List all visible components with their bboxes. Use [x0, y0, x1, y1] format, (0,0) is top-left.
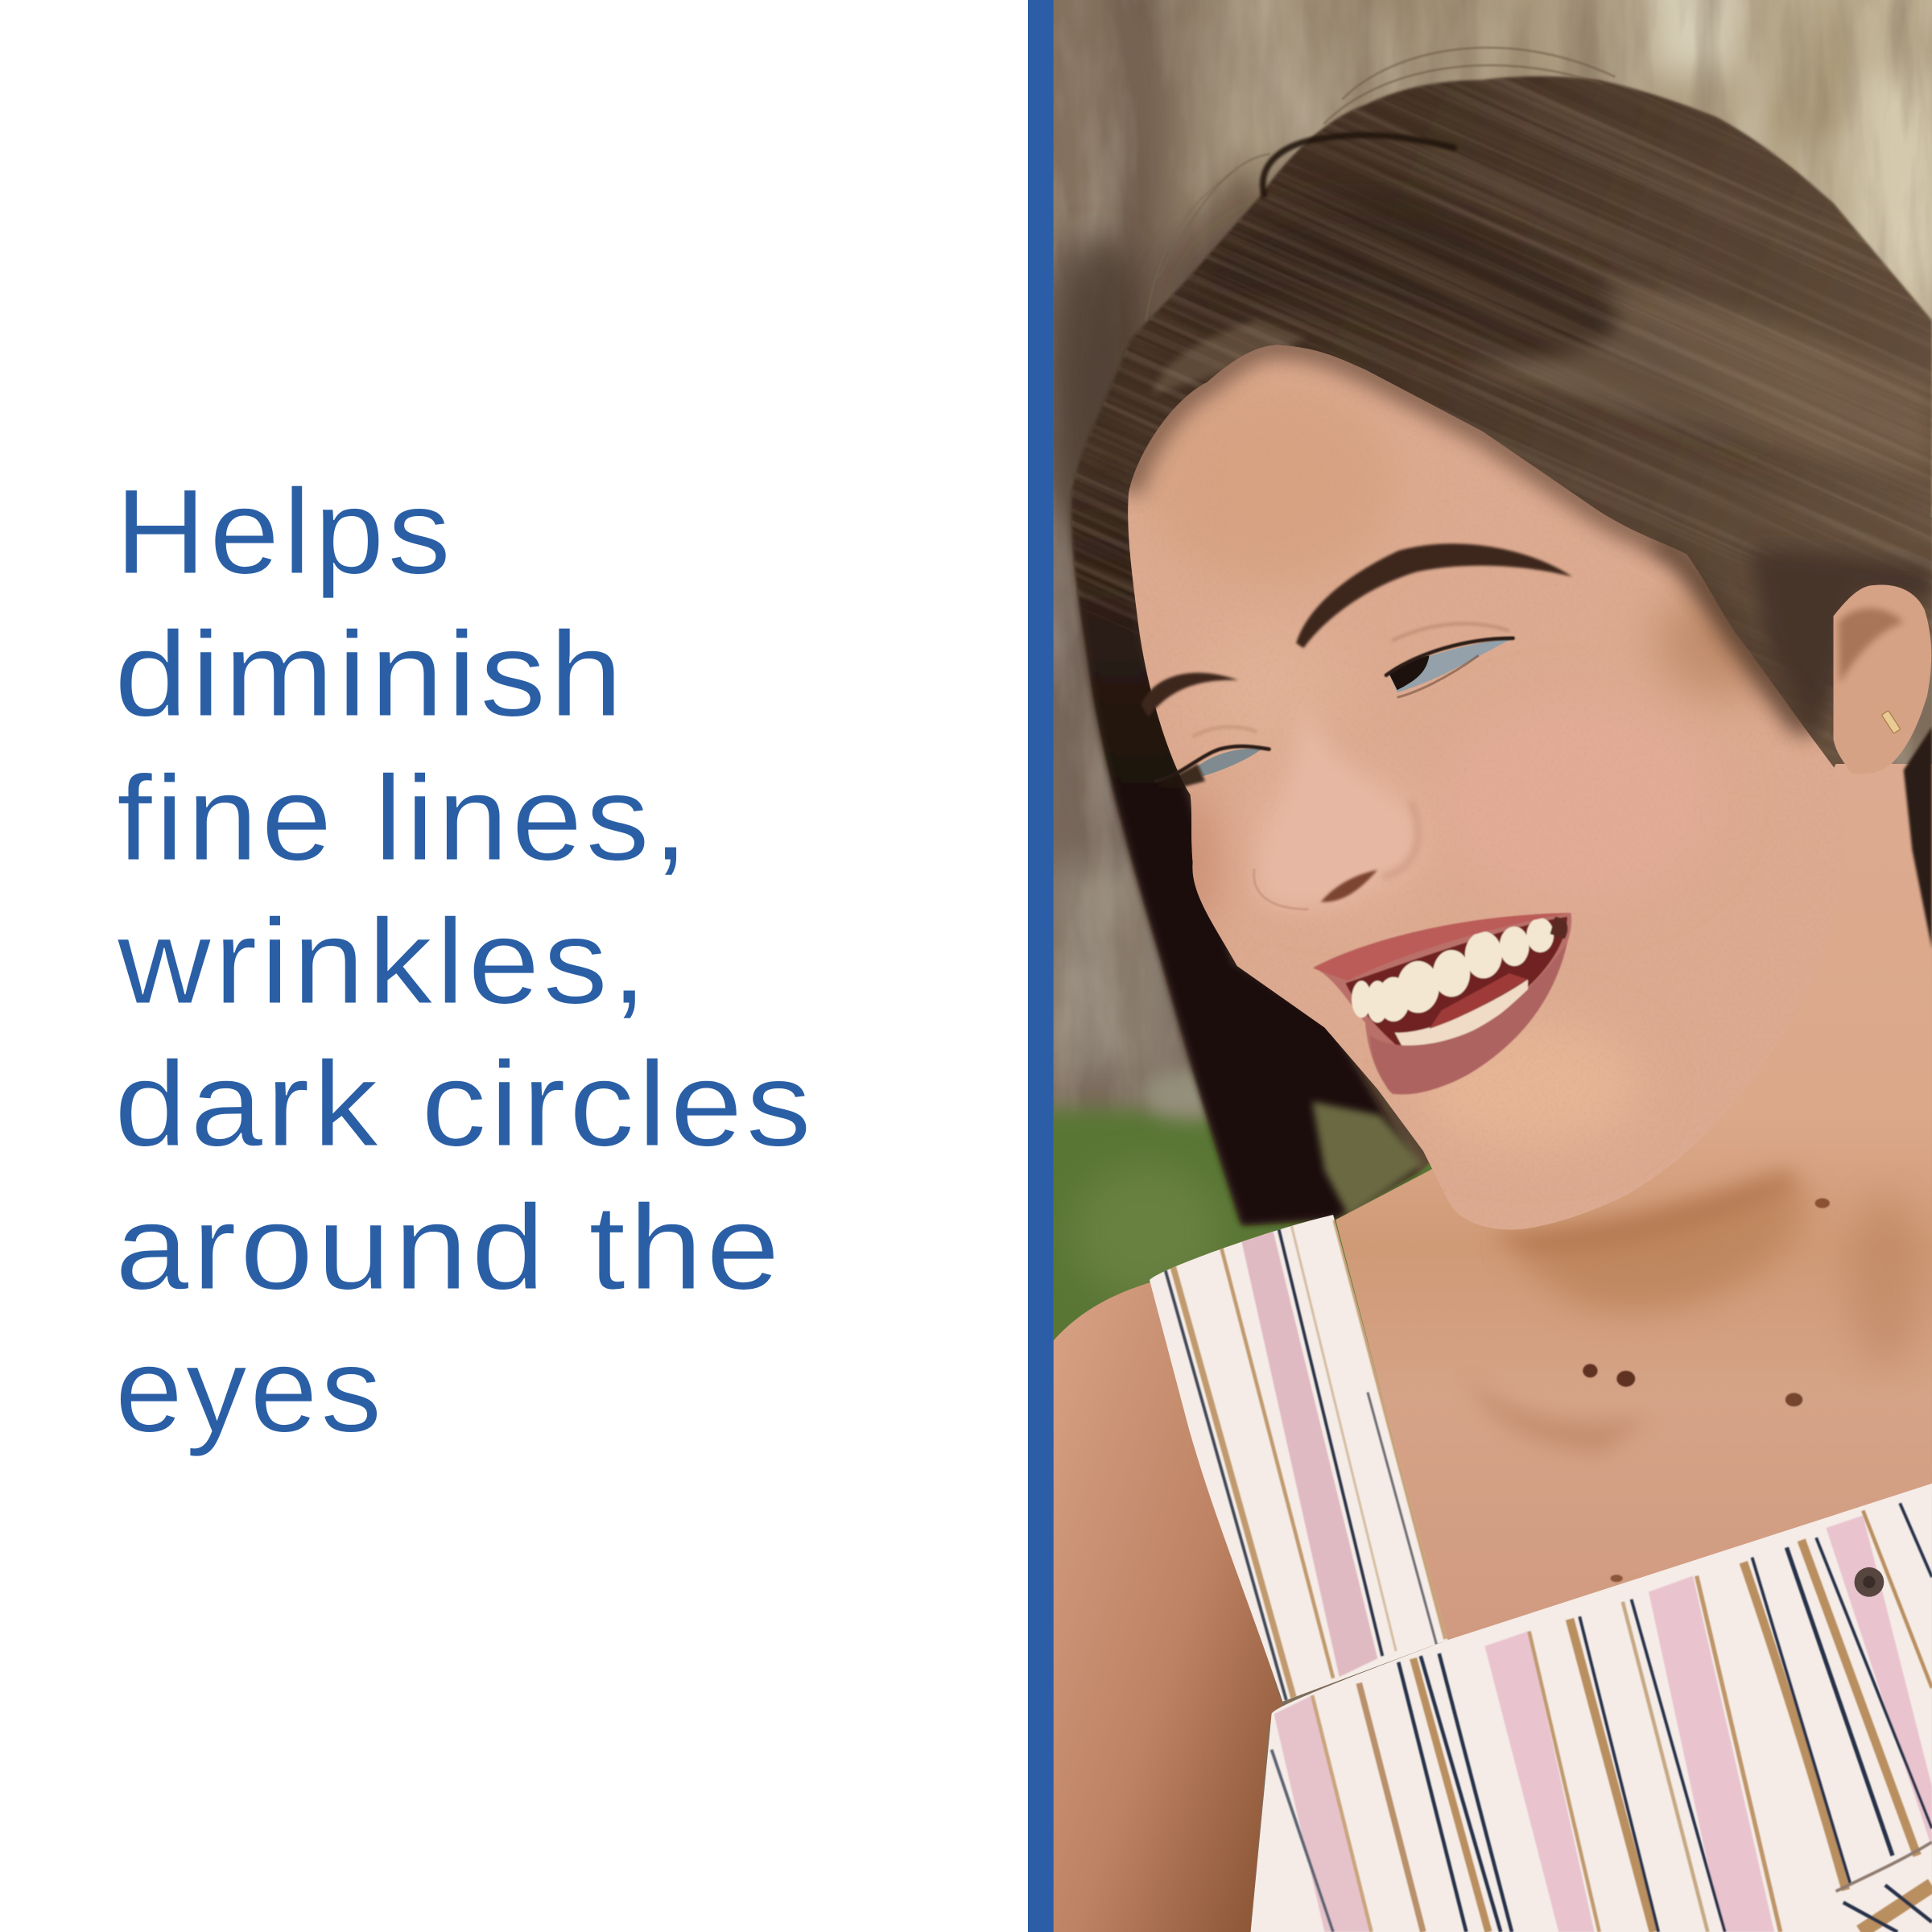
hair highlight	[1454, 283, 1932, 474]
right eye	[1386, 624, 1513, 697]
headline text	[114, 464, 815, 1457]
dark left strands	[1073, 456, 1417, 1224]
headline text: diminish	[114, 606, 626, 741]
ear	[1834, 585, 1931, 774]
shoulder	[1054, 1282, 1282, 1932]
smile: lips and teeth	[1314, 913, 1571, 1094]
blue vertical divider bar	[1028, 0, 1054, 1932]
hair lowlight	[1183, 199, 1799, 469]
headline text: fine lines,	[117, 750, 691, 886]
hair behind ear	[1749, 548, 1932, 949]
moles on neck and chest	[1583, 1199, 1830, 1582]
hair	[828, 0, 1932, 1224]
photo: smiling woman in striped top	[1053, 0, 1932, 1932]
temple hair fading into skin	[1657, 542, 1814, 734]
earring	[1881, 711, 1901, 733]
headline text: around the	[115, 1179, 783, 1315]
dress bodice	[1251, 1484, 1932, 1932]
eyebrows	[1141, 543, 1572, 717]
neck and chest skin	[1335, 764, 1932, 1645]
hairline feather	[1129, 345, 1804, 727]
hair strand texture	[1072, 77, 1932, 625]
face	[1109, 320, 1873, 1257]
nose	[1254, 702, 1418, 910]
headline text: dark circles	[114, 1036, 815, 1171]
left eye	[1156, 727, 1269, 789]
neck shading	[1466, 1170, 1922, 1454]
headline text: wrinkles,	[117, 894, 650, 1029]
photo background: bark and grass	[1022, 0, 1932, 1932]
headline text: eyes	[115, 1322, 385, 1457]
dress strap	[1150, 1215, 1447, 1702]
headline text: Helps	[115, 464, 454, 599]
wispy translucent hair edge	[1174, 175, 1259, 283]
shirt button	[1855, 1567, 1884, 1597]
flyaway curl	[1263, 135, 1454, 195]
